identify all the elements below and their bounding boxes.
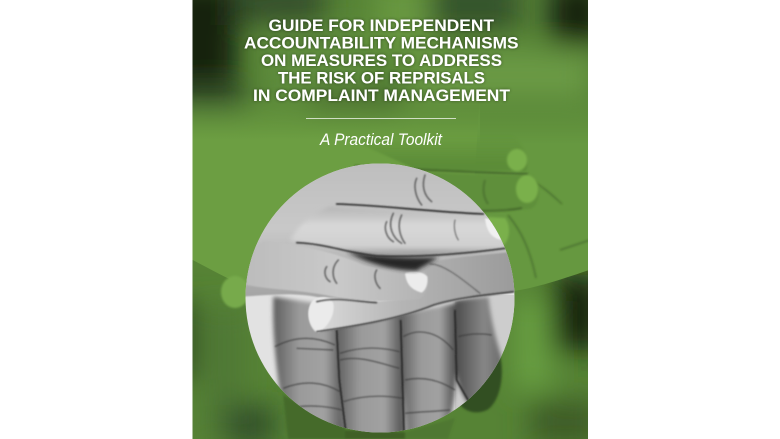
finger gaps	[337, 310, 470, 437]
title: GUIDE FOR INDEPENDENT	[268, 17, 494, 35]
green fingertip right of disc	[458, 355, 502, 412]
knuckle wrinkles	[325, 175, 458, 288]
green hand at right	[480, 114, 588, 291]
cover photo background	[192, 0, 588, 439]
photo disc	[246, 164, 514, 432]
older hand fingers	[273, 297, 503, 439]
green fingertip at left	[221, 276, 249, 308]
middle finger lighter area	[290, 207, 505, 254]
subtitle: A Practical Toolkit	[319, 131, 443, 149]
index finger	[246, 250, 419, 301]
thumb	[309, 252, 518, 333]
younger hand	[240, 157, 520, 333]
green fingers at top right	[354, 148, 538, 244]
blurred background tones	[192, 0, 588, 439]
title: ON MEASURES TO ADDRESS	[261, 52, 502, 70]
divider under title	[306, 118, 456, 119]
green fingers below the disc	[283, 395, 455, 439]
report cover infographic	[192, 0, 588, 439]
title	[244, 17, 518, 105]
title: THE RISK OF REPRISALS	[278, 70, 485, 88]
shadow between fingers	[347, 252, 438, 271]
finger wrinkles	[275, 332, 492, 413]
title: ACCOUNTABILITY MECHANISMS	[244, 34, 518, 52]
green arm from the left	[185, 92, 480, 290]
title: IN COMPLAINT MANAGEMENT	[253, 87, 510, 105]
hand creases	[297, 204, 513, 332]
